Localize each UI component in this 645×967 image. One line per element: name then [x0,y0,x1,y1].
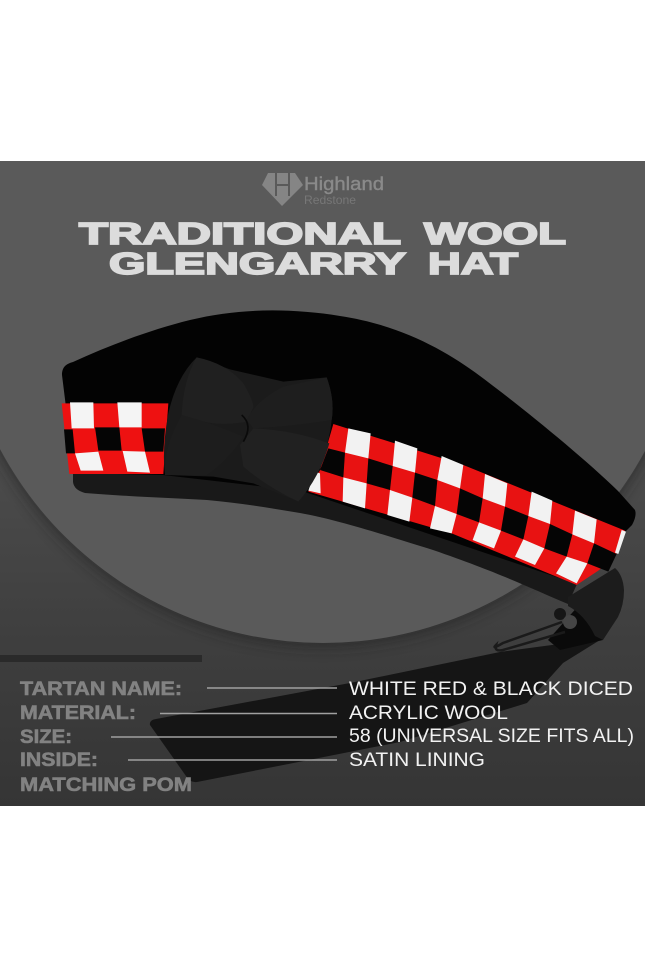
accent bar [0,655,202,662]
right diced band [308,424,626,585]
title [79,217,566,281]
spec labels: MATCHING POM [20,775,192,796]
connector lines [111,688,337,760]
logo: Highland Redstone [262,173,384,207]
tail fold [568,568,624,640]
spec labels: INSIDE: [20,750,98,771]
title: HAT [428,247,519,281]
logo: Highland Redstone: Redstone [304,193,356,207]
cord loop [495,622,565,650]
toggle [554,608,577,629]
title: TRADITIONAL [79,217,401,251]
spec values [349,678,634,771]
spec labels: SIZE: [20,727,72,748]
crown [62,310,636,590]
spec values: ACRYLIC WOOL [349,702,508,724]
title: GLENGARRY [109,247,406,281]
spec labels: TARTAN NAME: [20,679,182,700]
panel: dark gradient background [0,161,645,806]
spec values: SATIN LINING [349,749,485,771]
hat [62,310,636,650]
infographic canvas [0,161,645,806]
logo: Highland Redstone: Highland [304,173,384,194]
spec values: WHITE RED & BLACK DICED [349,678,633,700]
spec labels: MATERIAL: [20,703,136,724]
brim band [73,473,577,604]
bow [164,357,333,502]
ribbon tail [150,620,613,782]
spec values: 58 (UNIVERSAL SIZE FITS ALL) [349,725,634,747]
under-fold shadow [548,604,603,650]
left diced band [62,402,168,474]
title: WOOL [424,217,566,251]
spec labels [20,679,192,796]
